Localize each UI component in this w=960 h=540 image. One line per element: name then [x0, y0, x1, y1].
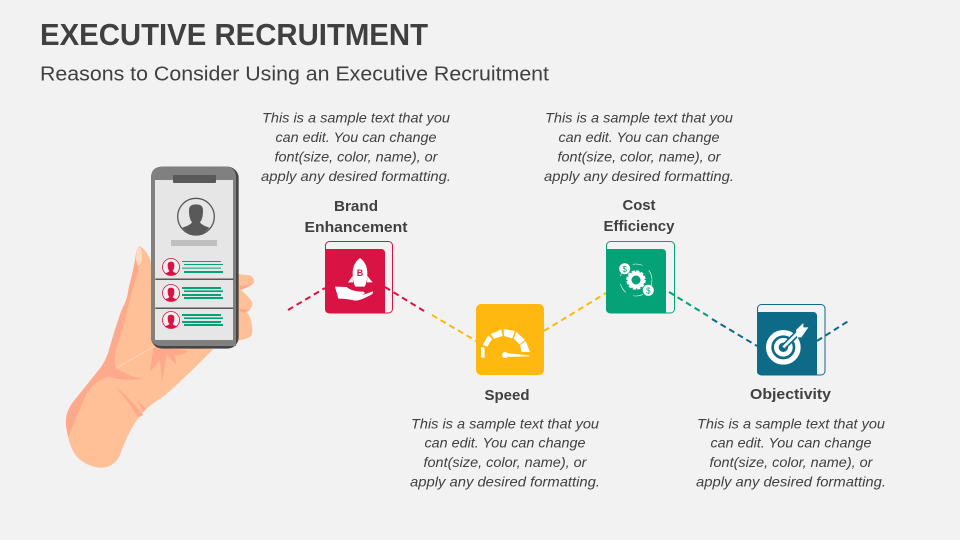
text block: cost efficiency description [544, 110, 734, 184]
heading: brand enhancement: Enhancement [304, 219, 408, 236]
icon: speedometer [476, 304, 544, 375]
heading: objectivity: Objectivity [750, 386, 832, 403]
text block: brand enhancement description: font(size, color, name), or [274, 148, 439, 164]
icon: gear with dollars: $ [646, 286, 651, 296]
text block: speed description: apply any desired formatting. [410, 474, 600, 490]
title: EXECUTIVE RECRUITMENT [40, 17, 428, 52]
heading: cost efficiency: Efficiency [604, 218, 675, 235]
hand [66, 246, 254, 468]
text block: speed description: can edit. You can change [424, 434, 586, 450]
heading: cost efficiency: Cost [622, 197, 656, 214]
profile avatar [178, 198, 214, 235]
step: Brand Enhancement [261, 110, 451, 313]
heading: brand enhancement: Brand [334, 198, 378, 215]
text block: brand enhancement description: This is a sample text that you [262, 110, 450, 126]
text block: speed description: This is a sample text that you [411, 416, 599, 432]
text block: cost efficiency description: font(size, color, name), or [558, 148, 722, 164]
text block: brand enhancement description: can edit. You can change [276, 129, 437, 145]
subtitle: Reasons to Consider Using an Executive Recruitment [40, 64, 549, 86]
text block: cost efficiency description: This is a sample text that you [545, 110, 733, 126]
text block: speed description [410, 416, 600, 490]
text block: objectivity description: font(size, color, name), or [710, 454, 874, 470]
icon: rocket in hand: B [357, 268, 364, 278]
icon: target with arrow [757, 304, 825, 375]
step: Objectivity [696, 304, 886, 490]
icon: gear with dollars [606, 242, 674, 313]
text block: objectivity description: can edit. You can change [710, 434, 872, 450]
text block: speed description: font(size, color, name), or [424, 454, 588, 470]
phone [151, 167, 239, 349]
step: Cost Efficiency [544, 110, 734, 313]
heading: cost efficiency [604, 197, 675, 235]
text block: brand enhancement description: apply any desired formatting. [261, 168, 451, 184]
illustration: hand holding phone [66, 167, 254, 468]
text block: cost efficiency description: can edit. You can change [558, 129, 720, 145]
icon: rocket in hand [325, 242, 392, 313]
text block: objectivity description: This is a sample text that you [697, 416, 885, 432]
text block: brand enhancement description [261, 110, 451, 184]
text block: objectivity description: apply any desired formatting. [696, 474, 886, 490]
icon: gear with dollars: $ [622, 265, 627, 274]
candidate row 3 [162, 311, 223, 328]
text block: objectivity description [696, 416, 886, 490]
candidate row 1 [162, 258, 223, 275]
candidate row 2 [162, 284, 223, 301]
dashed connector line [288, 287, 850, 346]
step: Speed [410, 304, 600, 490]
text block: cost efficiency description: apply any desired formatting. [544, 168, 734, 184]
heading: speed: Speed [484, 387, 530, 404]
heading: brand enhancement [304, 198, 408, 236]
